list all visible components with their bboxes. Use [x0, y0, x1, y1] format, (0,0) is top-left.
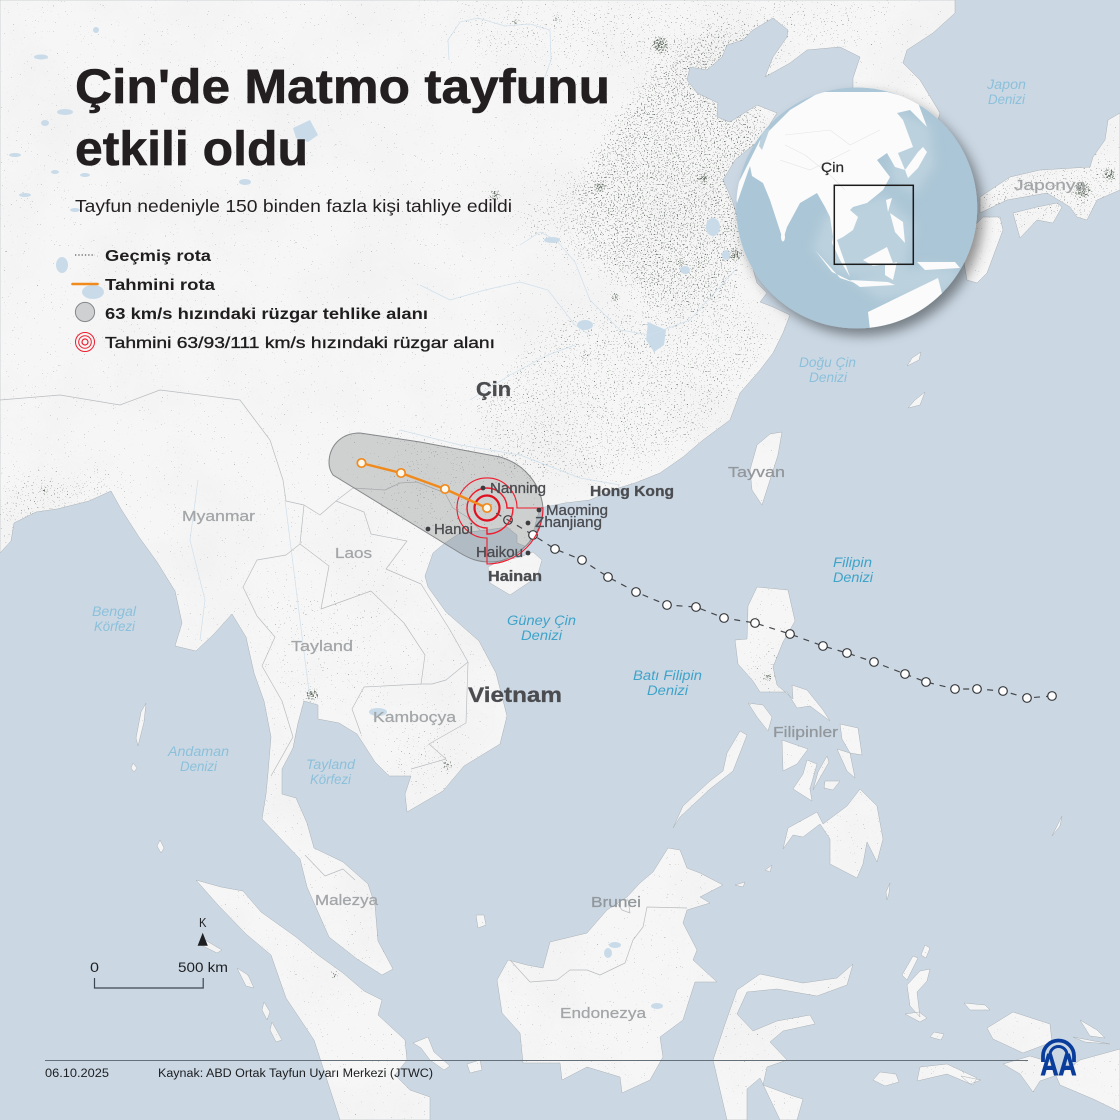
country labels: Tayland [291, 638, 353, 655]
city labels: Hanoi [434, 522, 473, 538]
scale bar: 500 km [178, 960, 228, 975]
sea labels: Denizi [180, 759, 218, 774]
sea labels: Denizi [809, 370, 848, 385]
title: Çin'de Matmo tayfunu [75, 61, 610, 114]
country labels: Myanmar [182, 508, 255, 525]
locator globe [735, 88, 977, 330]
city labels: Hong Kong [590, 483, 674, 500]
country labels: Çin [476, 379, 511, 401]
scale bar [90, 960, 228, 988]
legend: danger area: 63 km/s hızındaki rüzgar tehlike alanı [105, 306, 428, 323]
locator box [834, 185, 913, 264]
sea labels: Körfezi [94, 619, 136, 634]
country labels: Tayvan [728, 464, 785, 481]
title [75, 61, 610, 176]
footer: 06.10.2025 [45, 1068, 109, 1080]
footer: Kaynak: ABD Ortak Tayfun Uyarı Merkezi (JTWC) [158, 1068, 433, 1080]
sea labels: Denizi [988, 92, 1026, 107]
country labels [182, 177, 1087, 1022]
storm: forecast track [357, 459, 491, 512]
country labels: Filipinler [773, 724, 838, 741]
legend: past route [75, 248, 211, 265]
sea labels: Güney Çin [507, 613, 576, 628]
sea labels: Körfezi [310, 772, 352, 787]
country labels: Laos [335, 545, 372, 562]
sea labels [92, 77, 1026, 787]
country labels: Kamboçya [373, 709, 457, 726]
globe label: Çin [821, 159, 844, 175]
sea labels: Denizi [521, 628, 563, 643]
city labels [426, 481, 674, 585]
sea labels: Bengal [92, 604, 137, 619]
logo: AA [1040, 1040, 1076, 1082]
subtitle: Tayfun nedeniyle 150 binden fazla kişi tahliye edildi [75, 196, 512, 216]
sea labels: Filipin [833, 555, 872, 570]
sea labels: Japon [986, 77, 1026, 92]
sea labels: Doğu Çin [799, 355, 856, 370]
country labels: Malezya [315, 892, 379, 909]
logo: AA: AA [1040, 1047, 1076, 1082]
legend: forecast wind rings: Tahmini 63/93/111 km/s hızındaki rüzgar alanı [105, 335, 495, 352]
country labels: Brunei [591, 894, 641, 911]
sea labels: Tayland [306, 757, 356, 772]
sea labels: Denizi [833, 570, 874, 585]
sea labels: Denizi [647, 683, 689, 698]
city labels: Maoming [546, 503, 608, 519]
legend: forecast route: Tahmini rota [105, 277, 215, 294]
legend: past route: Geçmiş rota [105, 248, 211, 265]
legend: danger area [75, 302, 428, 323]
north arrow: K [199, 916, 207, 930]
scale bar: 0 [90, 960, 99, 975]
city labels: Nanning [490, 481, 546, 497]
city labels: Hainan [488, 568, 542, 585]
sea labels: Batı Filipin [633, 668, 702, 683]
legend [72, 248, 495, 352]
storm: past track [487, 508, 1056, 702]
title: etkili oldu [75, 123, 308, 176]
storm: forecast wind radii [457, 478, 543, 564]
city labels: Haikou [476, 545, 523, 561]
storm: 63 km/s wind danger area [329, 433, 543, 562]
north arrow [198, 916, 208, 946]
footer [45, 1060, 1028, 1080]
country labels: Endonezya [560, 1005, 647, 1022]
country labels: Japonya [1014, 177, 1087, 194]
country labels: Vietnam [468, 684, 562, 707]
sea labels: Andaman [167, 744, 229, 759]
city labels: Zhanjiang [535, 515, 602, 531]
legend: forecast wind rings [76, 332, 495, 352]
